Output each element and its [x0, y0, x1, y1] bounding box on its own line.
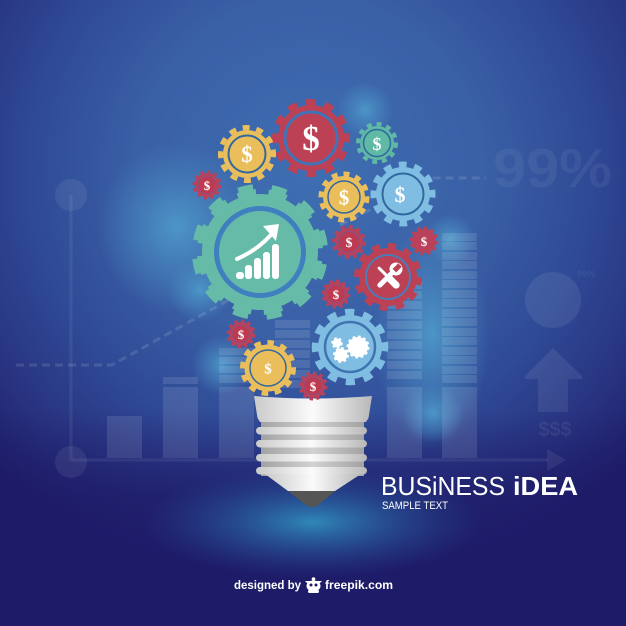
gear: yellow lower dollar	[242, 342, 294, 394]
gear: small red lower left dollar	[228, 321, 254, 347]
gear: small red lower dollar: $	[333, 287, 340, 302]
title bold word: iDEA	[513, 471, 578, 501]
bulb inner thread shadow	[261, 420, 364, 476]
gear: yellow middle dollar	[321, 174, 367, 220]
gear: small red right dollar	[411, 228, 437, 254]
ghost 99% label: 99%	[493, 137, 612, 199]
subtitle: SAMPLE TEXT	[382, 500, 448, 512]
credit right: freepik.com	[325, 580, 393, 592]
gear: small red left dollar: $	[204, 178, 211, 193]
gear: small red center dollar: $	[346, 236, 352, 251]
ghost up arrow	[525, 348, 582, 412]
gear: yellow left dollar: $	[241, 142, 253, 167]
bulb thread rings	[256, 427, 367, 474]
ghost chart axes	[55, 179, 566, 478]
gear: small red lower dollar	[323, 281, 349, 307]
gear: light blue with cogs	[310, 307, 390, 387]
credit left: designed by	[234, 580, 302, 592]
ghost pie circle	[525, 272, 581, 328]
bulb tapered neck	[265, 474, 361, 491]
gear: light blue dollar: $	[394, 182, 406, 207]
light bulb base	[254, 396, 372, 507]
gear: light blue dollar	[370, 161, 436, 227]
gear: small red center dollar	[334, 226, 364, 258]
gear: top red dollar	[271, 98, 351, 178]
icon: crossed tools	[376, 262, 402, 290]
gear: top red dollar: $	[302, 119, 320, 158]
icon: growth bars and arrow	[236, 224, 279, 279]
title: BUSiNESS	[381, 471, 505, 501]
gear: small teal dollar	[358, 124, 396, 162]
icon: white cogs	[332, 336, 368, 362]
gear: yellow middle dollar: $	[339, 186, 349, 210]
gear: large teal growth chart	[177, 169, 343, 335]
ghost small 99% label: 99%	[577, 269, 595, 279]
ghost dollar signs: $$$	[538, 419, 572, 441]
gear: small red lower left dollar: $	[238, 327, 245, 342]
bulb tip	[288, 491, 335, 507]
gear: small red right dollar: $	[421, 234, 428, 249]
gear: red wrench and screwdriver	[357, 246, 419, 308]
bulb collar	[254, 396, 372, 422]
gear: small red left dollar	[194, 172, 220, 198]
gear: yellow lower dollar: $	[264, 362, 272, 378]
gear: yellow left dollar	[217, 124, 277, 184]
ghost bar chart	[107, 233, 477, 458]
gear: small red above bulb dollar	[300, 373, 326, 399]
gear: small teal dollar: $	[372, 134, 382, 154]
ghost dashed trend line	[16, 178, 486, 365]
icon: freepik logo	[305, 577, 322, 593]
gear: small red above bulb dollar: $	[310, 379, 317, 394]
